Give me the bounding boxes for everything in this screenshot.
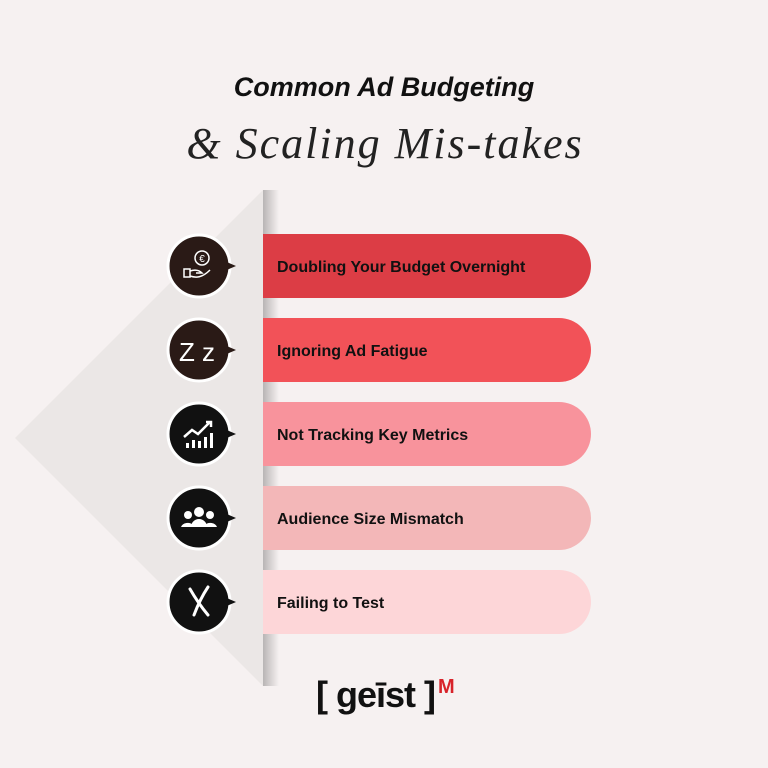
item 4: Audience Size Mismatch bbox=[277, 510, 464, 528]
item 3 bbox=[263, 402, 591, 466]
item 1: Doubling Your Budget Overnight bbox=[277, 258, 525, 276]
item 5: Failing to Test bbox=[277, 594, 384, 612]
item 2 bbox=[263, 318, 591, 382]
item 4 bbox=[263, 486, 591, 550]
item 2: Ignoring Ad Fatigue bbox=[277, 342, 428, 360]
icon: X bbox=[166, 570, 236, 634]
icon: money hand bbox=[166, 234, 236, 298]
icon: Zz bbox=[166, 318, 236, 382]
item 3: Not Tracking Key Metrics bbox=[277, 426, 468, 444]
icon: audience bbox=[166, 486, 236, 550]
icon: money hand: € bbox=[199, 254, 205, 265]
item 5 bbox=[263, 570, 591, 634]
item 1 bbox=[263, 234, 591, 298]
icon: chart bbox=[166, 402, 236, 466]
icon: Zz: Z z bbox=[179, 337, 215, 367]
title: Common Ad Budgeting bbox=[234, 72, 534, 102]
script subtitle: & Scaling Mis-takes bbox=[186, 119, 584, 168]
logo: [ geīst ]M bbox=[316, 674, 454, 715]
